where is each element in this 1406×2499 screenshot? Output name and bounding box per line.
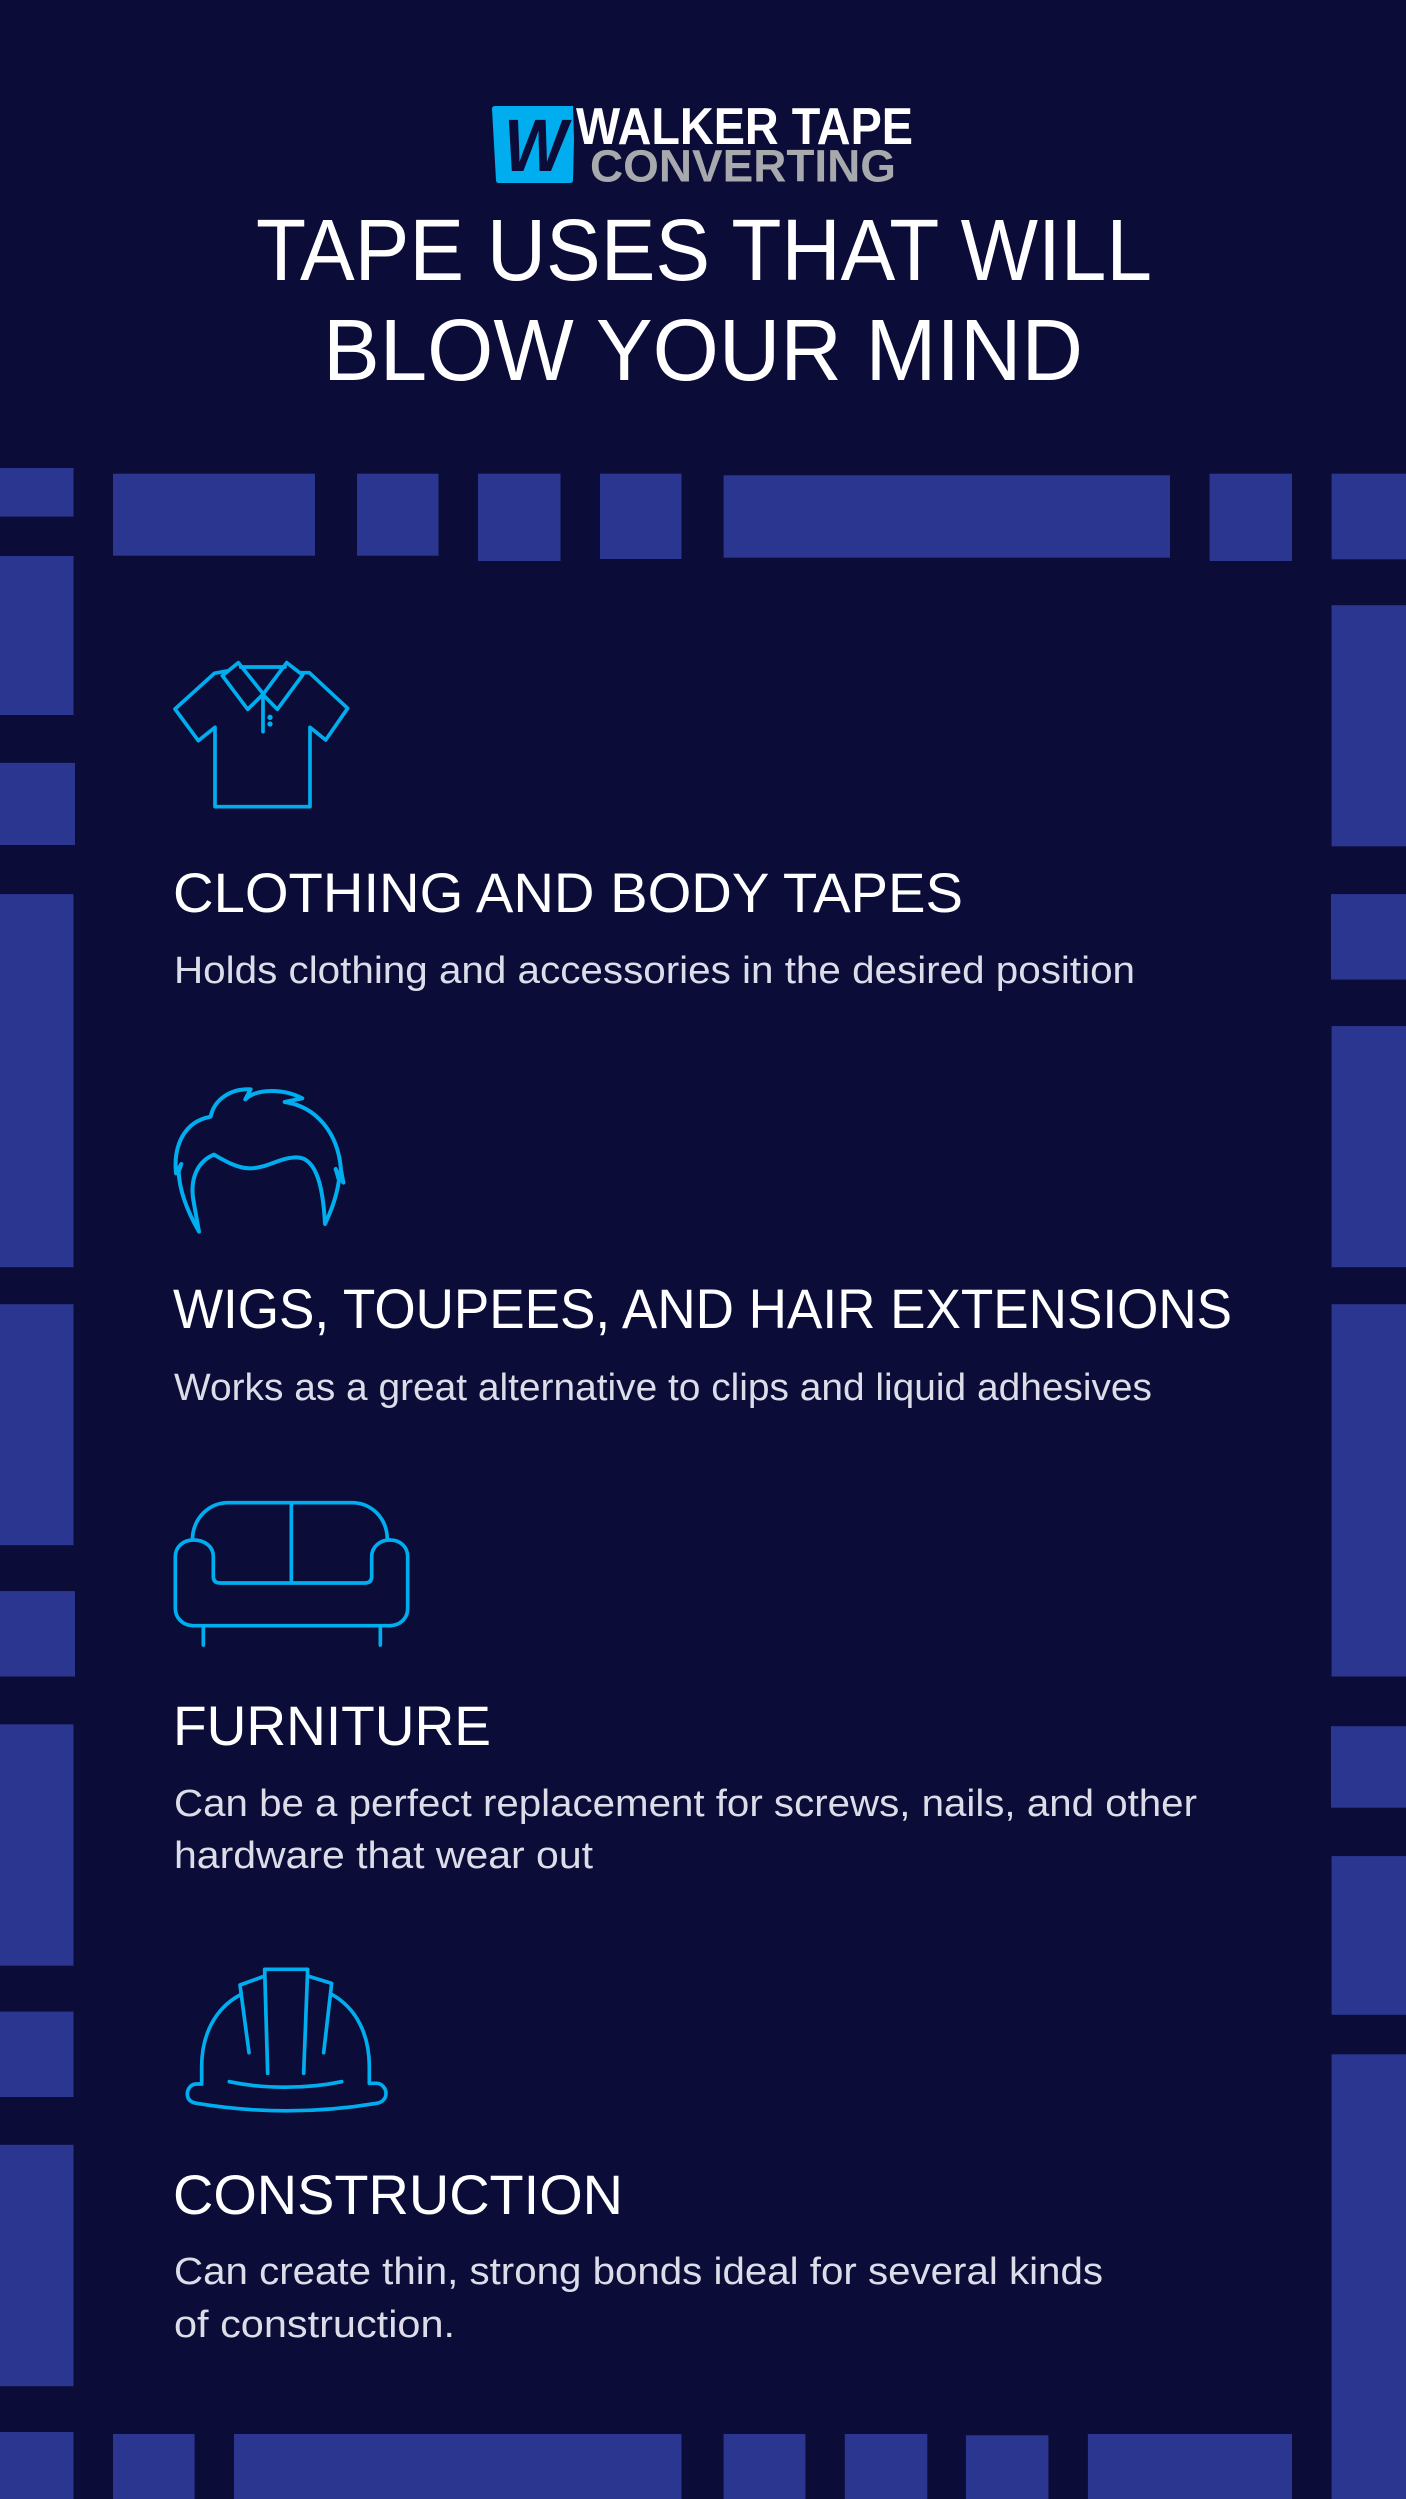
text: construction description: Can create thin, strong bonds ideal for several kinds (174, 2251, 1103, 2293)
heading: clothing: CLOTHING AND BODY TAPES (173, 861, 963, 924)
text: furniture description: Can be a perfect replacement for screws, nails, and other (174, 1783, 1197, 1825)
icon: polo shirt (175, 663, 348, 807)
icon: hair (176, 1089, 343, 1232)
logo wordmark: Converting: CONVERTING (590, 140, 896, 192)
logo wordmark: Walker Tape: WALKER TAPE (576, 98, 913, 156)
title: TAPE USES THAT WILL (256, 202, 1152, 299)
text: clothing description: Holds clothing and accessories in the desired position (174, 950, 1135, 992)
tape border: bottom row (113, 2434, 1292, 2499)
tape border: right column (1331, 474, 1406, 2499)
logo mark: blue W box: W (504, 104, 573, 187)
title: BLOW YOUR MIND (323, 302, 1083, 399)
text: furniture description (174, 1783, 1197, 1877)
icon: hard hat (187, 1969, 386, 2111)
text: construction description: of construction. (174, 2304, 455, 2346)
tape border: left column (0, 468, 75, 2499)
logo: Walker Tape Converting (492, 98, 913, 192)
icon: sofa (175, 1503, 408, 1645)
heading: furniture: FURNITURE (173, 1694, 491, 1757)
text: construction description (174, 2251, 1103, 2346)
heading: wigs: WIGS, TOUPEES, AND HAIR EXTENSIONS (173, 1277, 1232, 1340)
tape border: top row (113, 474, 1292, 561)
text: wigs description: Works as a great alternative to clips and liquid adhesives (174, 1367, 1152, 1409)
heading: construction: CONSTRUCTION (173, 2163, 623, 2226)
text: furniture description: hardware that wear out (174, 1835, 593, 1877)
title (256, 202, 1152, 399)
